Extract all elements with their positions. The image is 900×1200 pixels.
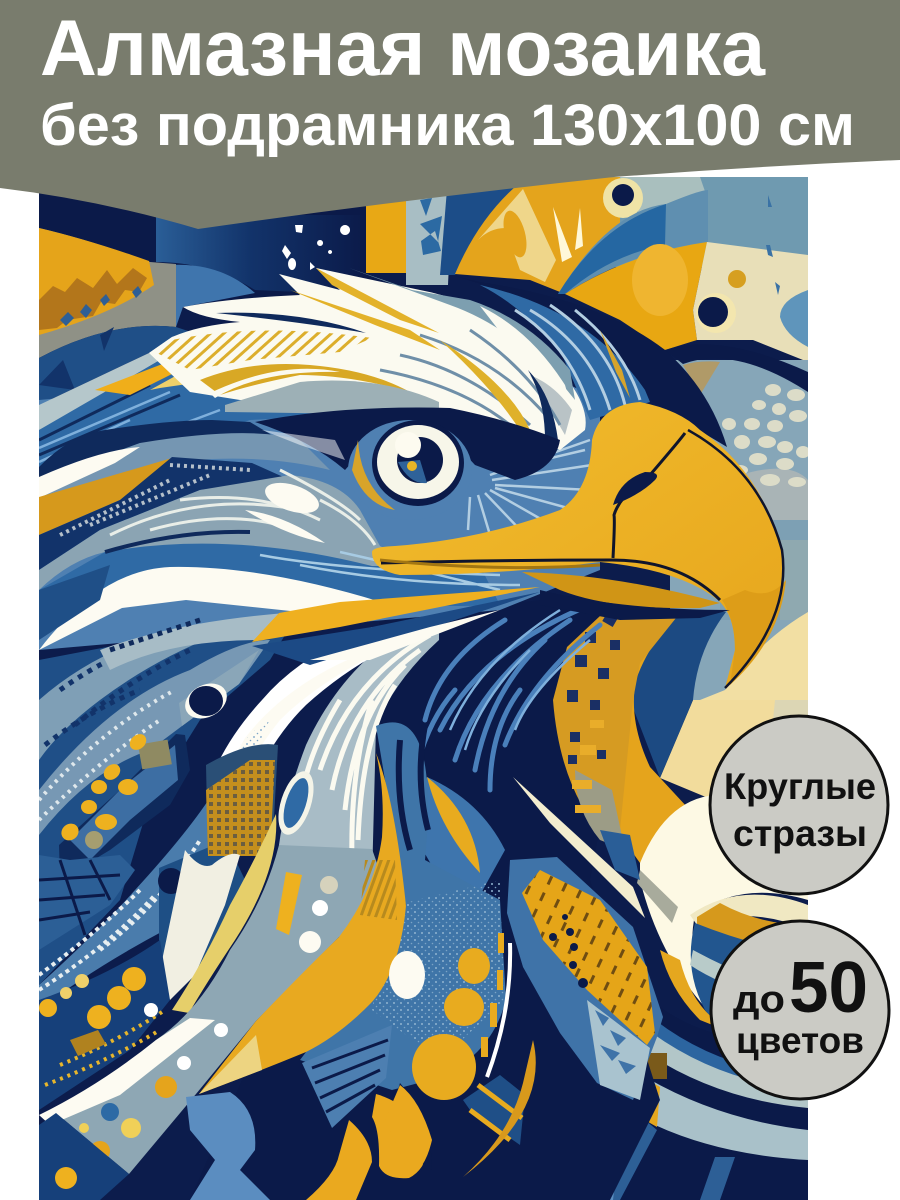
badge: up to 50 colours: цветов [736, 1020, 864, 1061]
badge: round rhinestones: Круглые [724, 766, 876, 807]
background: upper left [39, 188, 514, 400]
lower centre feathers and shapes [186, 722, 536, 1200]
badge: round rhinestones: стразы [733, 813, 867, 854]
title: Алмазная мозаика [40, 3, 766, 92]
eagle head [39, 276, 808, 670]
eagle picture [39, 177, 810, 1200]
badge: up to 50 colours: 50 [789, 948, 868, 1028]
top banner [0, 0, 900, 229]
background: lower right stripes [610, 1024, 808, 1200]
neck and dark body [422, 604, 676, 1200]
left feather mass [39, 610, 390, 1200]
badge: up to 50 colours: до [733, 979, 785, 1021]
background: right side with dots [607, 360, 810, 1030]
badge: up to 50 colours [711, 921, 889, 1099]
white crest feathers [149, 268, 586, 450]
background: upper right [455, 177, 808, 362]
beak [372, 402, 786, 688]
white plume fan [220, 627, 439, 852]
eye [255, 408, 560, 520]
subtitle: без подрамника 130х100 см [40, 93, 855, 158]
badge: round rhinestones [710, 716, 888, 894]
right feather with yellow oval [507, 857, 663, 1100]
